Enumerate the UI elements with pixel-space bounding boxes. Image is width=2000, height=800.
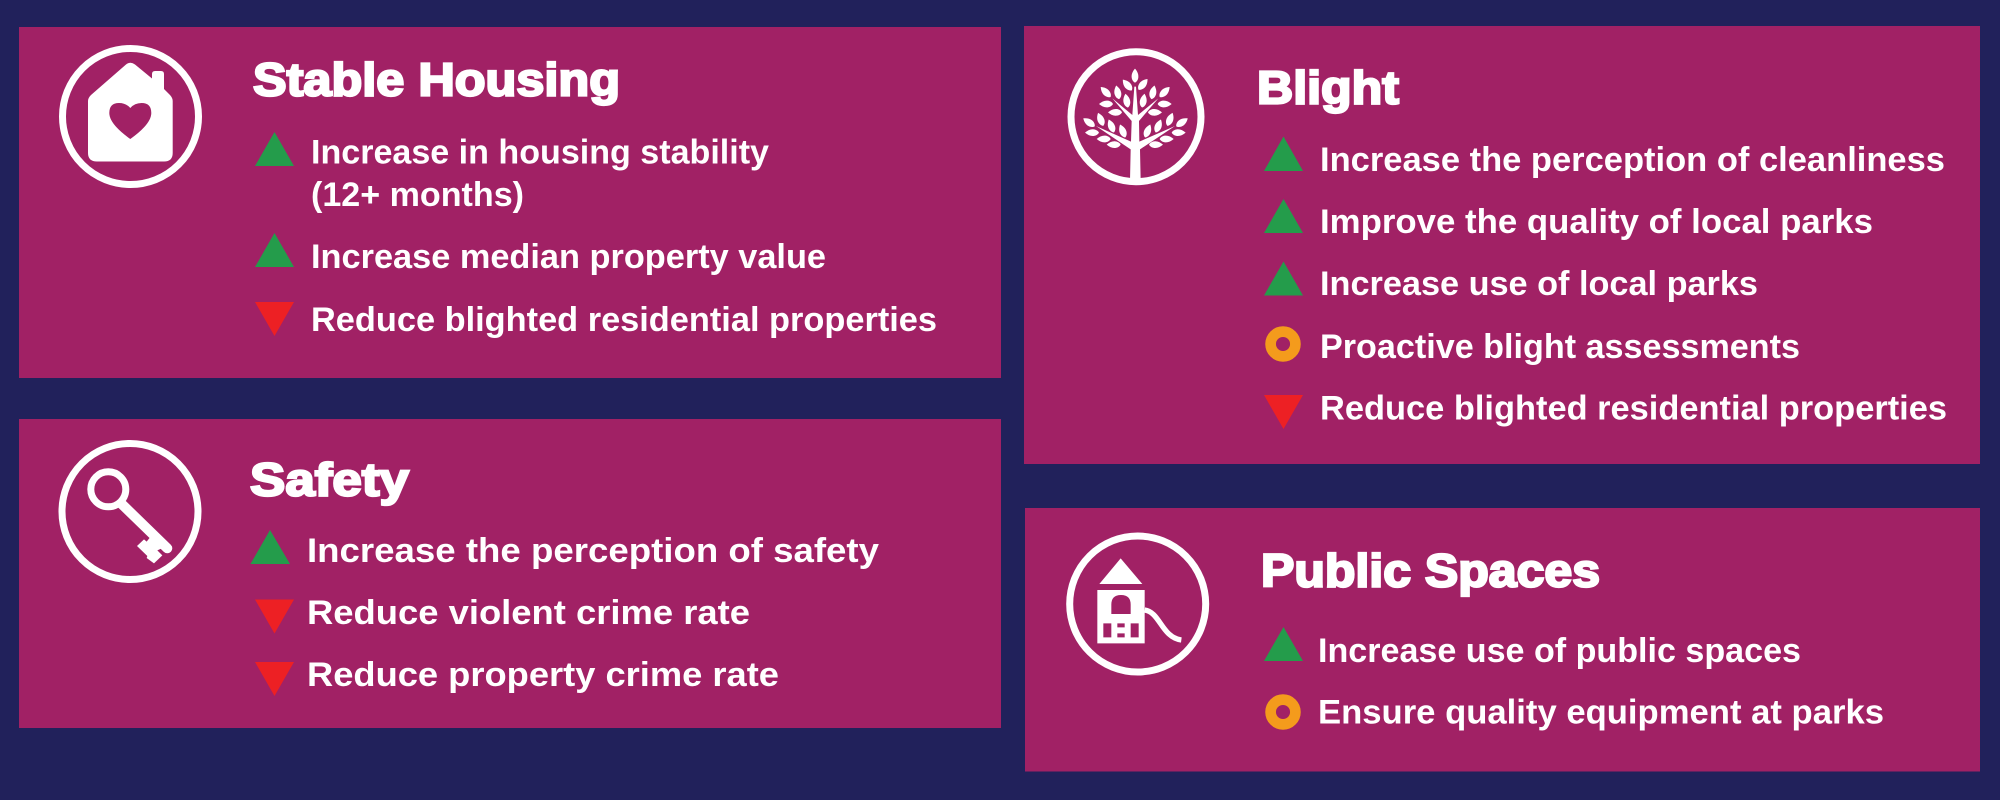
text: perception of cleanliness: Increase the perception of cleanliness xyxy=(1320,141,1945,179)
text: quality equipment: Ensure quality equipment at parks xyxy=(1318,694,1884,732)
icon: up triangle xyxy=(255,233,294,267)
text: property value: Increase median property value xyxy=(311,238,826,276)
icon: up triangle xyxy=(255,132,294,166)
text: blighted properties: Reduce blighted residential properties xyxy=(1320,390,1947,428)
text: perception of safety: Increase the perception of safety xyxy=(307,532,879,570)
text: housing stability: Increase in housing stability xyxy=(311,134,769,172)
icon: up triangle xyxy=(1264,262,1303,296)
text: proactive assessments: Proactive blight assessments xyxy=(1320,328,1800,366)
heading: Stable Housing: Stable Housing xyxy=(253,54,620,106)
text: 12+ months: (12+ months) xyxy=(311,176,524,214)
text: property crime: Reduce property crime rate xyxy=(307,656,779,694)
text: use of local parks: Increase use of local parks xyxy=(1320,265,1758,303)
heading: Public Spaces: Public Spaces xyxy=(1261,544,1600,596)
icon: neutral ring xyxy=(1271,700,1295,724)
icon: up triangle xyxy=(1264,199,1303,233)
heading: Blight: Blight xyxy=(1257,62,1399,114)
icon: tree xyxy=(1071,52,1201,182)
panel: safety xyxy=(19,419,1001,728)
text: blighted properties: Reduce blighted residential properties xyxy=(311,301,937,339)
icon: playground slide xyxy=(1070,536,1206,672)
icon: down triangle xyxy=(255,600,294,634)
icon: up triangle xyxy=(1264,136,1303,171)
panel: stable housing xyxy=(19,27,1001,378)
icon: up triangle xyxy=(250,530,290,564)
icon: house with heart xyxy=(62,48,198,184)
icon: down triangle xyxy=(255,302,294,336)
icon: neutral ring xyxy=(1271,332,1295,356)
text: violent crime: Reduce violent crime rate xyxy=(307,594,750,632)
text: use of public spaces: Increase use of public spaces xyxy=(1318,632,1801,670)
text: quality of local parks: Improve the quality of local parks xyxy=(1320,203,1873,241)
icon: down triangle xyxy=(255,662,294,696)
panel: public spaces xyxy=(1025,508,1980,772)
panel: blight xyxy=(1024,26,1980,464)
heading: Safety: Safety xyxy=(250,454,409,506)
icon: key xyxy=(62,444,198,580)
icon: down triangle xyxy=(1264,395,1303,429)
icon: up triangle xyxy=(1264,627,1303,661)
